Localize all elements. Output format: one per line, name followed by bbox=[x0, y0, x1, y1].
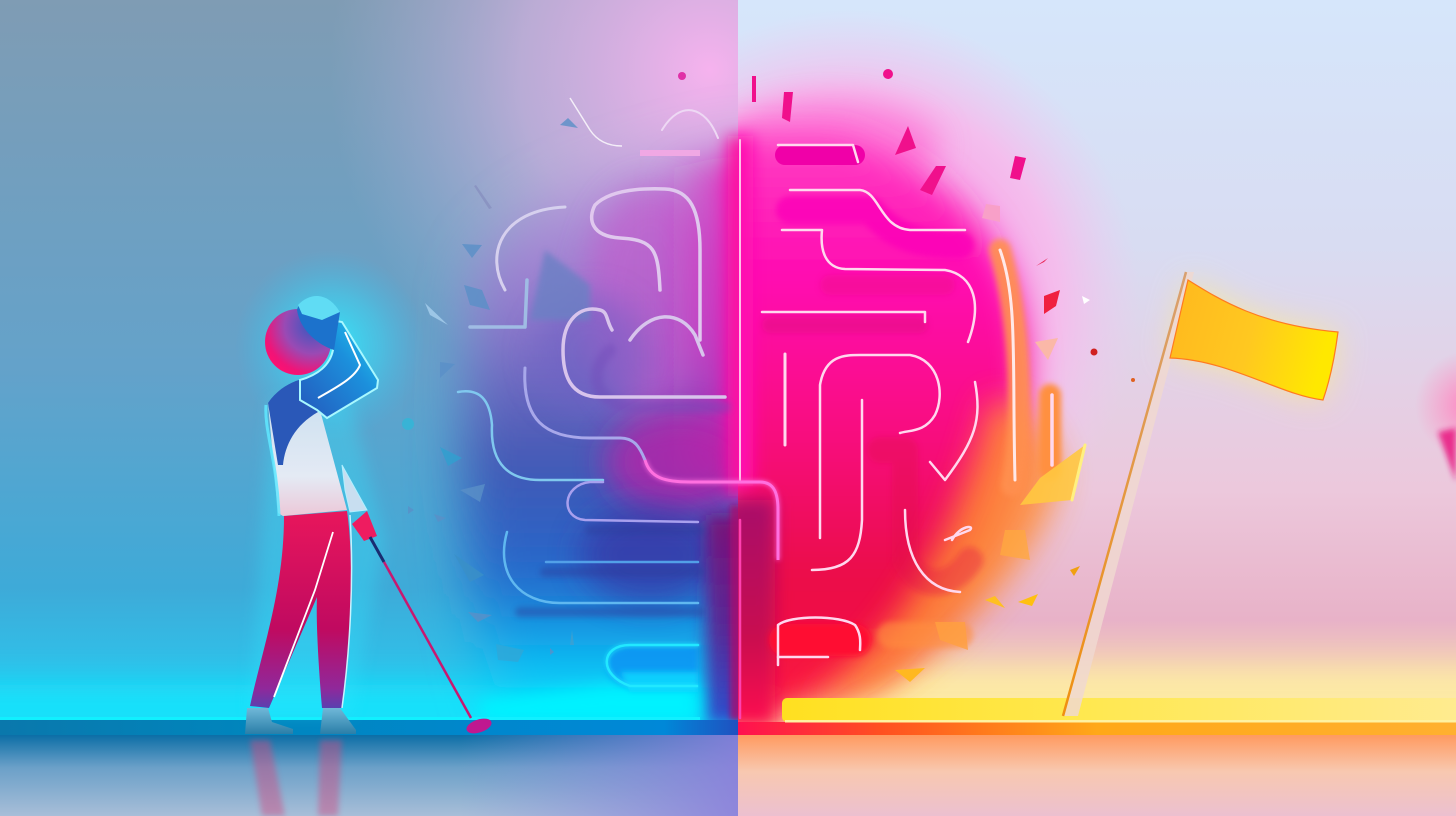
club bbox=[370, 537, 493, 736]
shaded maze channels bbox=[520, 250, 725, 612]
hemisphere base bbox=[462, 140, 760, 725]
reflection left bbox=[0, 735, 738, 816]
hand and grip bbox=[352, 511, 377, 541]
trousers bbox=[250, 511, 351, 708]
shaded maze channels bbox=[770, 155, 1085, 640]
background: left half bbox=[0, 0, 738, 720]
panel: brain left hemisphere bbox=[458, 110, 770, 725]
head bbox=[265, 309, 331, 375]
halo bbox=[235, 250, 425, 440]
particles: right scatter bbox=[678, 69, 1135, 682]
particles: left scatter bbox=[402, 98, 622, 662]
panel: brain right hemisphere bbox=[720, 100, 1456, 725]
pole bbox=[1062, 272, 1194, 716]
icon: pink fragment at right edge bbox=[1438, 428, 1456, 482]
soft pink glow above bbox=[720, 100, 940, 190]
yellow base bar bbox=[782, 698, 1456, 722]
figure: golfer bbox=[235, 250, 493, 736]
maze lines bbox=[458, 110, 725, 686]
pennant bbox=[1170, 280, 1338, 400]
bar left bbox=[0, 720, 738, 735]
shoes bbox=[245, 708, 293, 734]
reflection right bbox=[738, 735, 1456, 816]
background: right half bbox=[738, 0, 1456, 722]
floor bbox=[0, 717, 1456, 816]
bar right bbox=[738, 722, 1456, 735]
maze lines bbox=[740, 140, 1085, 718]
lower arm bbox=[342, 465, 367, 512]
hemisphere base bbox=[720, 135, 1027, 725]
raised arm bbox=[300, 320, 378, 418]
golfer reflection bbox=[250, 740, 342, 816]
cyan base bar bbox=[480, 685, 698, 722]
flag: goal bbox=[1062, 272, 1338, 716]
torso bbox=[268, 385, 347, 516]
hands on head bbox=[297, 297, 340, 350]
glowing connector line bbox=[645, 460, 778, 560]
shoulder blue bbox=[268, 378, 318, 465]
